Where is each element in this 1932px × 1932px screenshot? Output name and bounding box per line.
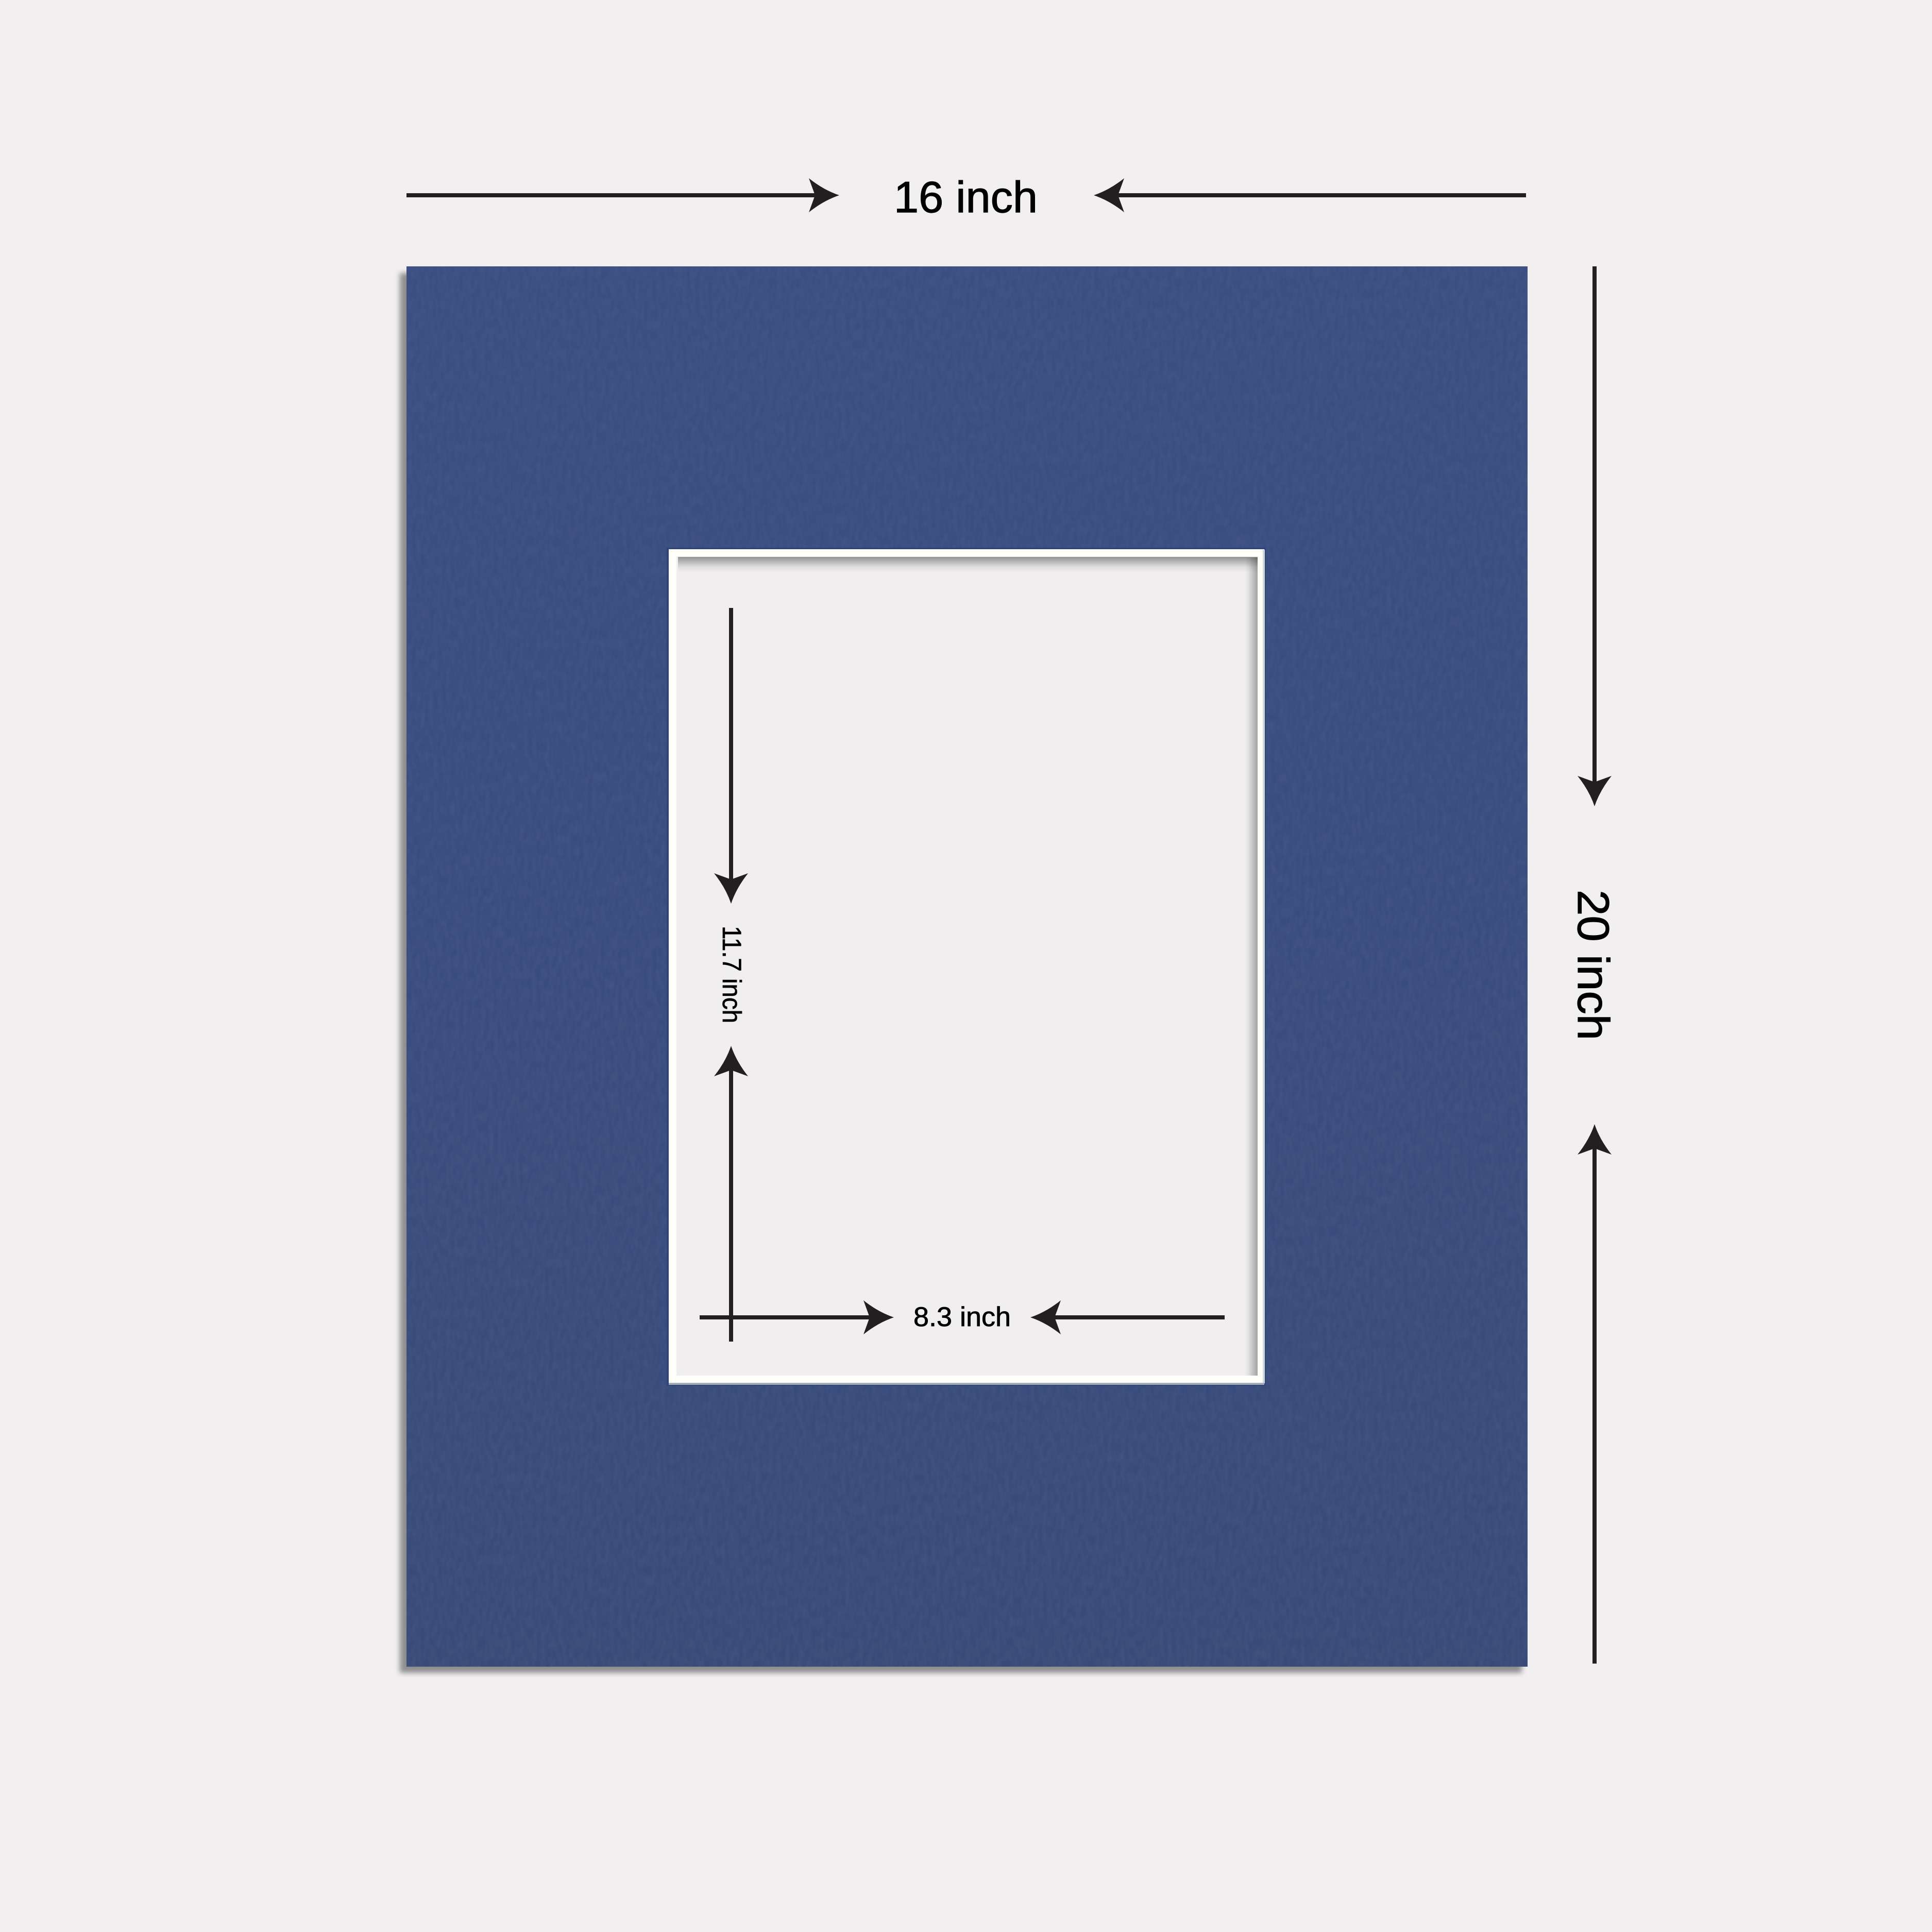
label: 20 inch: 20 inch (1568, 890, 1618, 1040)
mat blue surface (406, 266, 1528, 1667)
inner shadow: right (1245, 557, 1258, 1376)
label: 11.7 inch: 11.7 inch (717, 926, 747, 1023)
arrow: 20 inch down (1578, 266, 1612, 806)
inner shadow: top (678, 557, 1258, 572)
arrow: 11.7 inch up (714, 1046, 748, 1342)
mat drop shadow (400, 273, 1522, 1673)
mat paper grain (406, 266, 1528, 1667)
window opening (667, 548, 1266, 1386)
arrow: 8.3 inch left (700, 1300, 894, 1334)
arrow: 8.3 inch right (1030, 1300, 1225, 1334)
white bevel (669, 549, 1264, 1385)
arrow: 11.7 inch down (714, 608, 748, 904)
bevel right edge (1263, 550, 1265, 1383)
arrow: 20 inch up (1578, 1124, 1612, 1664)
window interior (676, 556, 1258, 1376)
opening cut edge (667, 548, 1266, 1386)
arrow: 16 inch right (1094, 178, 1526, 212)
label: 8.3 inch: 8.3 inch (913, 1302, 1011, 1332)
arrow: 16 inch left (406, 178, 839, 212)
mat board (400, 266, 1528, 1673)
bevel lower edge (669, 1383, 1264, 1385)
label: 16 inch: 16 inch (894, 173, 1038, 222)
